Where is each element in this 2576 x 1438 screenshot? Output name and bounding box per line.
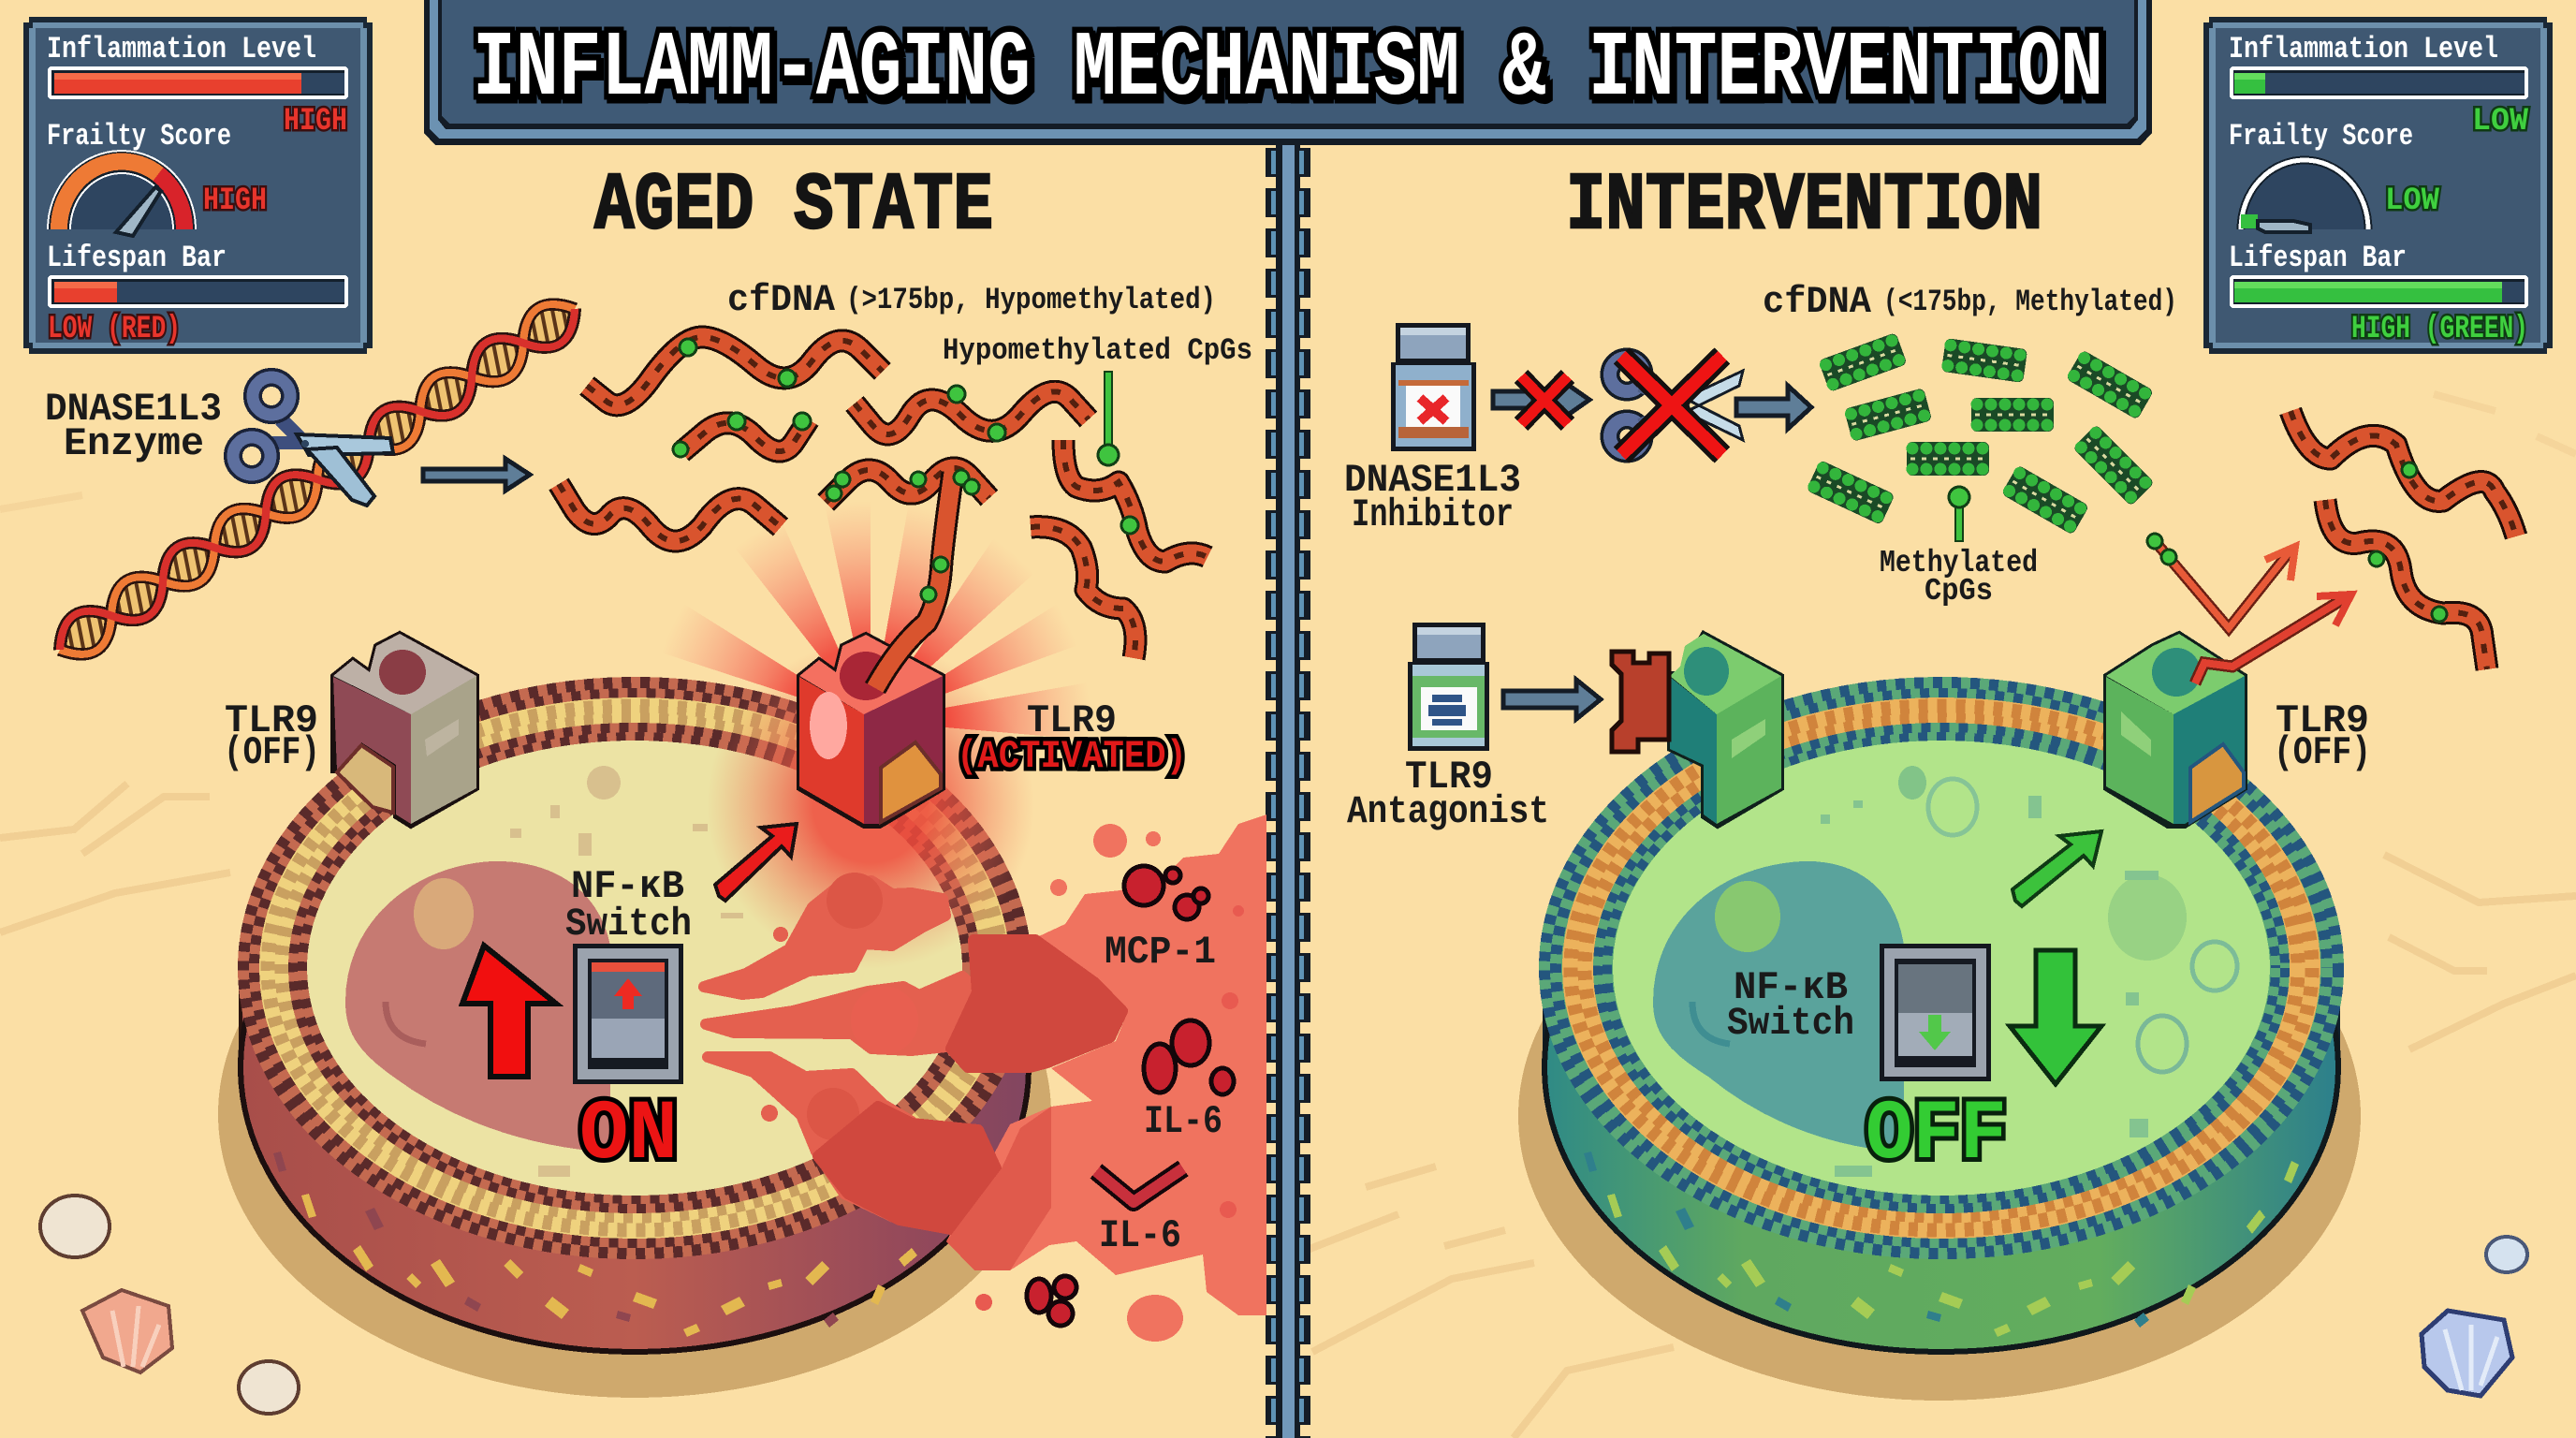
panel: intervention status [2203, 17, 2553, 354]
label: cfDNA long [727, 280, 1216, 322]
heading: intervention: INTERVENTION [1566, 160, 2042, 252]
label: DNASE1L3 inhibitor: DNASE1L3 [1344, 458, 1521, 503]
NF-kB switch label, aged: Switch [565, 902, 692, 946]
cell wall [1544, 783, 2338, 1352]
label: TLR9 off: (OFF) [224, 730, 320, 775]
big red x [1621, 356, 1722, 455]
label: methylated CpGs: CpGs [1925, 574, 1993, 609]
molecule: IL-6 second: IL-6 [1099, 1213, 1181, 1258]
bottle: TLR9 antagonist [1408, 623, 1489, 751]
plume lower [708, 1057, 932, 1220]
label: methylated CpGs [1880, 546, 2038, 609]
ring through receptor [337, 745, 393, 813]
arrow: antagonist to TLR9 [1503, 680, 1601, 719]
label: cfDNA short: cfDNA [1763, 282, 1871, 324]
label: TLR9 antagonist: Antagonist [1347, 789, 1549, 834]
cytokine splatter and plumes [704, 814, 1266, 1342]
label: TLR9 activated: (ACTIVATED) [957, 734, 1187, 779]
lifespan low tag: LOW (RED) [48, 312, 181, 347]
label: TLR9 off [224, 698, 320, 775]
frailty label: Frailty Score [2229, 119, 2413, 154]
cell: intervention [1518, 677, 2361, 1401]
label: TLR9 activated: TLR9 [1027, 698, 1117, 743]
cfDNA fragments, repelled [2291, 411, 2516, 669]
shells, right [2422, 1237, 2527, 1396]
inflammation bar [48, 66, 348, 99]
TLR9 receptor, left, antagonised [1670, 634, 1781, 826]
NF-kB switch label, aged: NF-κB [571, 864, 684, 909]
label: TLR9 off, right [2274, 698, 2371, 775]
icon: small red x [1521, 376, 1568, 424]
nucleus [345, 861, 610, 1152]
frailty low tag: LOW [2385, 183, 2440, 219]
frailty gauge [59, 162, 184, 236]
molecule: IL-6 second [1096, 1168, 1183, 1258]
shells, left [40, 1196, 299, 1414]
NF-kB switch on [573, 944, 683, 1084]
long DNA double helix [49, 291, 586, 668]
cell wall [241, 783, 1029, 1352]
arrow: NF-kB to TLR9, red [715, 824, 797, 901]
cfDNA fragments, long hypomethylated [559, 337, 1208, 658]
NF-kB switch label, aged [565, 864, 692, 946]
icon: scissors enzyme [233, 377, 393, 506]
glow behind activated TLR9 [604, 440, 1150, 969]
label: TLR9 off, right: (OFF) [2274, 730, 2371, 775]
panel: aged state status [23, 17, 373, 354]
big up arrow [462, 946, 556, 1077]
plume upper [704, 881, 945, 994]
lifespan high tag: HIGH (GREEN) [2351, 312, 2528, 347]
membrane top face [238, 677, 1032, 1259]
molecule: MCP-1: MCP-1 [1105, 930, 1216, 975]
inflammation bar [2230, 66, 2528, 99]
label: TLR9 antagonist: TLR9 [1405, 755, 1493, 800]
molecule cluster small [1027, 1276, 1076, 1326]
frailty high tag: HIGH [203, 183, 267, 219]
arrow: cut to fragments [423, 459, 530, 491]
TLR9 receptor, off [333, 634, 476, 826]
plume middle [706, 976, 979, 1050]
membrane top face [1539, 677, 2344, 1259]
label: TLR9 activated [957, 698, 1187, 779]
OFF label: OFF [1866, 1088, 2007, 1183]
label: TLR9 off: TLR9 [225, 698, 318, 743]
arrow: blocked inhibitor [1493, 380, 1589, 419]
cfDNA bound to activated TLR9 [826, 468, 989, 688]
label: DNASE1L3 enzyme [45, 387, 222, 466]
pointer: hypomethylated CpG [1098, 372, 1119, 465]
arrow: to methylated cfDNA [1736, 386, 1811, 429]
inflammation label: Inflammation Level [47, 32, 316, 66]
darker overlap over ring [951, 940, 1122, 1067]
lifespan bar [2230, 275, 2528, 308]
cell: aged state [218, 677, 1051, 1398]
arrow: NF-kB to TLR9, green [2012, 831, 2101, 906]
label: cfDNA long: (>175bp, Hypomethylated) [846, 283, 1216, 317]
cell shadow [218, 830, 1051, 1398]
inflammation label: Inflammation Level [2229, 32, 2498, 66]
label: DNASE1L3 inhibitor: Inhibitor [1352, 492, 1514, 537]
frailty gauge [2241, 160, 2368, 232]
NF-kB switch label, intervention [1727, 965, 1854, 1046]
cell shadow [1518, 831, 2361, 1401]
ring through receptor [2190, 744, 2244, 822]
label: cfDNA short: (<175bp, Methylated) [1883, 285, 2177, 319]
pointer: methylated CpG [1949, 487, 1969, 541]
NF-kB switch off [1880, 944, 1991, 1081]
label: DNASE1L3 inhibitor [1344, 458, 1521, 537]
TLR9 antagonist block [1612, 652, 1669, 752]
title banner [424, 0, 2152, 145]
label: TLR9 antagonist [1347, 755, 1549, 834]
NF-kB switch label, intervention: NF-κB [1734, 965, 1848, 1010]
molecule: IL-6: IL-6 [1144, 1099, 1222, 1144]
center divider [1271, 144, 1305, 1438]
lifespan label: Lifespan Bar [47, 241, 227, 275]
label: cfDNA long: cfDNA [727, 280, 835, 322]
arrows: cfDNA repelled [2147, 534, 2351, 683]
label: TLR9 off, right: TLR9 [2276, 698, 2369, 743]
cell speckles [1821, 766, 2237, 1177]
icon: scissors blocked [1610, 356, 1743, 455]
molecule: IL-6 [1144, 1020, 1234, 1144]
lifespan bar [48, 275, 348, 308]
cell speckles [510, 766, 743, 1177]
NF-kB switch label, intervention: Switch [1727, 1001, 1854, 1046]
inflammation high tag: HIGH [284, 104, 347, 139]
nucleus [1653, 861, 1904, 1152]
heading: aged state: AGED STATE [594, 160, 993, 252]
frailty label: Frailty Score [47, 119, 231, 154]
label: methylated CpGs: Methylated [1880, 546, 2038, 580]
label: DNASE1L3 enzyme: Enzyme [64, 421, 204, 466]
label: hypomethylated CpGs: Hypomethylated CpGs [943, 333, 1252, 368]
ON label: ON [579, 1088, 678, 1183]
ring through receptor [881, 742, 941, 822]
bottle: DNASE1L3 inhibitor [1391, 323, 1476, 451]
methylated cfDNA clusters [1807, 332, 2155, 536]
molecule: MCP-1 [1105, 866, 1216, 975]
lifespan label: Lifespan Bar [2229, 241, 2407, 275]
TLR9 receptor, activated [799, 635, 943, 826]
title text: INFLAMM-AGING MECHANISM & INTERVENTION [473, 18, 2103, 122]
label: cfDNA short [1763, 282, 2177, 324]
inflammation low tag: LOW [2472, 104, 2529, 139]
TLR9 receptor, right [2106, 634, 2245, 826]
big down arrow [2010, 950, 2101, 1084]
label: DNASE1L3 enzyme: DNASE1L3 [45, 387, 222, 432]
